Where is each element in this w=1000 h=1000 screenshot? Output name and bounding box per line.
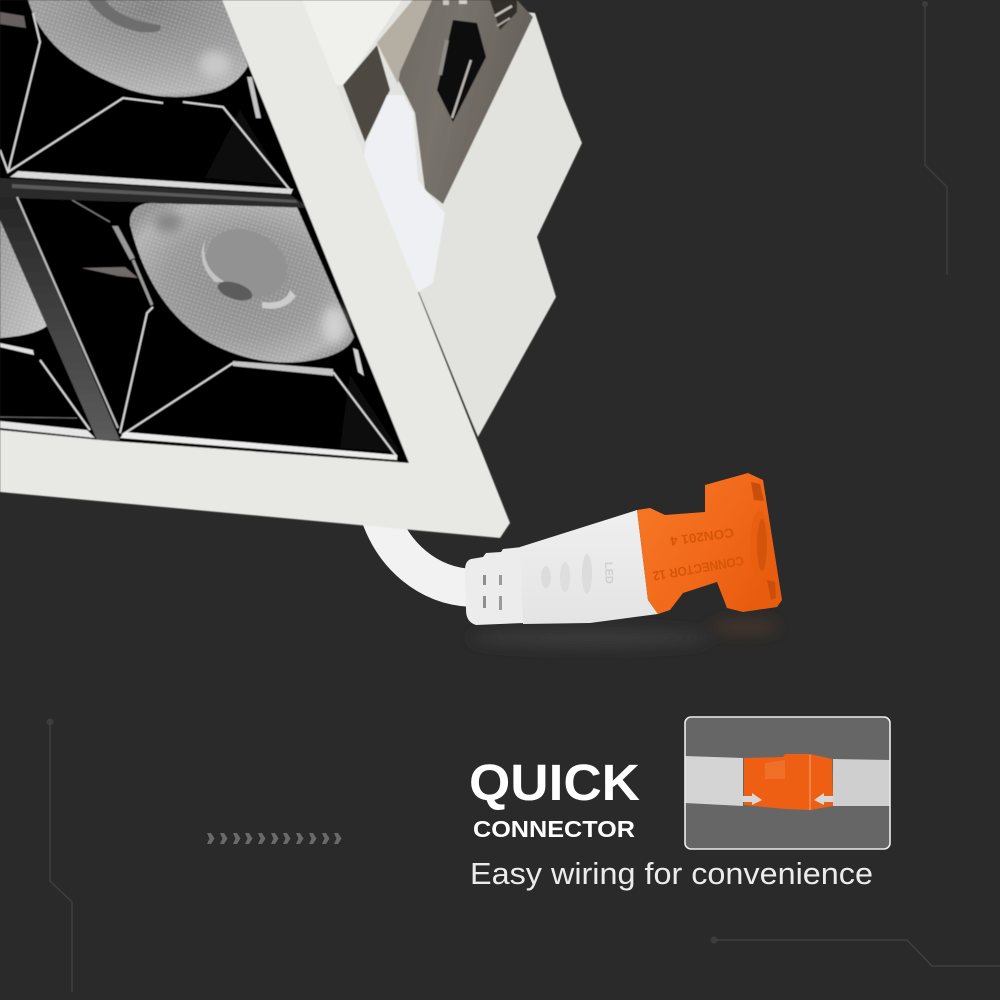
metal spring clip: [377, 0, 533, 204]
rear housing: [300, 0, 582, 437]
LED downlight fixture: [0, 0, 582, 538]
lens: top: [28, 0, 248, 97]
decorative circuit line: bottom left: [46, 718, 72, 992]
white boot: LED: [602, 562, 615, 584]
connector cable: [378, 510, 472, 588]
dark horizontal divider: [0, 178, 310, 208]
right cable: [833, 759, 890, 806]
black reflector cells: [0, 0, 420, 470]
grey reflector accents: [112, 226, 135, 260]
silver strip: upper cell: [10, 171, 293, 194]
dark vertical divider: [0, 197, 120, 440]
chevron row: [207, 833, 342, 844]
dark clip base: [343, 45, 390, 142]
orange coupling: [744, 754, 833, 810]
lens: centre: [130, 203, 354, 363]
white frame face: [0, 0, 510, 538]
embossed upside-down label: CONNECTOR 12: [652, 553, 745, 584]
white clip tab: [363, 95, 445, 293]
inset border: [685, 717, 890, 849]
bright wedge behind clip: [302, 0, 402, 85]
embossed upside-down label: [652, 525, 745, 584]
inset photo: connected plugs: [685, 717, 890, 849]
lens: left: [0, 220, 48, 339]
silver strip: lower right cell: [120, 432, 397, 460]
decorative circuit line: top right: [922, 1, 947, 275]
strain relief ribs: [465, 547, 524, 625]
embossed upside-down label: CON201 4: [668, 525, 735, 549]
headline: QUICK: QUICK: [469, 754, 640, 811]
tagline: Easy wiring for convenience: [470, 856, 873, 891]
silver strip: lower left cell: [0, 421, 95, 438]
connector reflection: [470, 620, 779, 647]
facet shading: [205, 110, 285, 185]
white boot: [520, 510, 658, 624]
inner edge strip: [264, 108, 401, 446]
decorative circuit line: bottom right: [710, 936, 1000, 966]
reflector facet lines: [0, 13, 397, 457]
left cable: [685, 756, 743, 806]
subheading: CONNECTOR: CONNECTOR: [473, 816, 635, 842]
orange head: [637, 473, 782, 614]
arrows: [743, 793, 762, 805]
quick connector plug: [465, 473, 782, 625]
